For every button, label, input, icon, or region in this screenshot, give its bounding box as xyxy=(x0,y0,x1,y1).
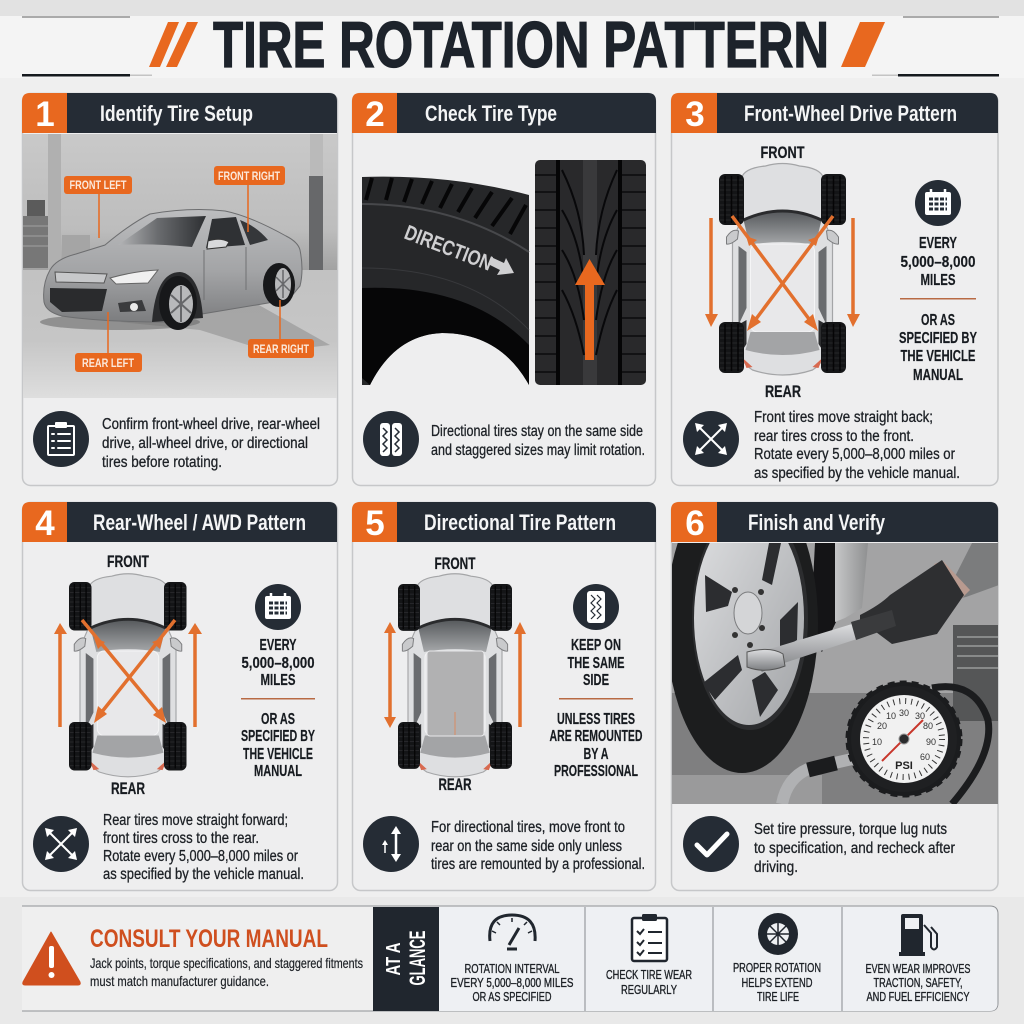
panel 4 description: as specified by the vehicle manual. xyxy=(103,866,304,883)
sleeve and glove holding wrench xyxy=(747,543,999,672)
interval text: MANUAL xyxy=(254,763,302,780)
tire sidewall with direction marking xyxy=(362,177,529,385)
glance cell 3: extend tire life: PROPER ROTATION xyxy=(733,961,821,975)
panel 1 description: drive, all-wheel drive, or directional xyxy=(102,435,308,452)
label: front left: FRONT LEFT xyxy=(70,178,127,192)
diagram: RWD/AWD rotation car top view xyxy=(54,574,202,777)
panel 5 header xyxy=(352,502,656,543)
panel 5 description: tires are remounted by a professional. xyxy=(431,856,645,873)
panel 4 header: 4 xyxy=(35,504,55,543)
panel 1 description: tires before rotating. xyxy=(102,454,222,471)
label: rear left: REAR LEFT xyxy=(82,356,135,370)
label: rear left xyxy=(75,353,142,372)
panel 2 header xyxy=(352,93,656,134)
same-side text: PROFESSIONAL xyxy=(554,763,638,780)
panel 4 description: Rear tires move straight forward; xyxy=(103,812,288,829)
icon: tire tread xyxy=(573,584,619,630)
sedan body xyxy=(44,210,302,322)
panel 5: directional tire pattern xyxy=(352,502,656,890)
panel 6 description xyxy=(754,821,955,876)
icon: vertical double arrow xyxy=(363,816,419,872)
glance cell 2: check tire wear xyxy=(585,907,713,1011)
interval text: EVERY xyxy=(260,637,297,654)
panel 5 header: Directional Tire Pattern xyxy=(424,510,616,535)
interval text: THE VEHICLE xyxy=(900,348,976,365)
glance cell 1: rotation interval: OR AS SPECIFIED xyxy=(472,990,552,1004)
panel 6: finish and verify xyxy=(666,473,999,890)
pressure gauge: 10 xyxy=(886,711,896,721)
panel 1 header: Identify Tire Setup xyxy=(100,101,253,126)
glance cell 3: extend tire life xyxy=(713,907,842,1011)
icon: tire xyxy=(758,913,798,955)
glance cell 2: check tire wear: REGULARLY xyxy=(621,983,677,997)
panel 2 header: Check Tire Type xyxy=(425,101,557,126)
tire tread with orange arrow xyxy=(535,160,646,385)
icon: checklist clipboard xyxy=(632,914,667,961)
panel 3 description: Rotate every 5,000–8,000 miles or xyxy=(754,446,955,463)
panel 2: check tire type xyxy=(352,93,656,486)
pressure gauge xyxy=(847,682,961,796)
interval text: 5,000–8,000 xyxy=(900,254,976,271)
panel 5 description xyxy=(431,819,645,873)
panel 5 header: 5 xyxy=(365,504,385,543)
wheel xyxy=(672,543,818,773)
same-side text: UNLESS TIRES xyxy=(557,711,635,728)
panel 1 description: Confirm front-wheel drive, rear-wheel xyxy=(102,416,320,433)
label: front: FRONT xyxy=(434,554,476,573)
icon: crossing arrows xyxy=(683,411,739,467)
glance cell 2: check tire wear: CHECK TIRE WEAR xyxy=(606,968,692,982)
panel 2 description: and staggered sizes may limit rotation. xyxy=(431,442,645,459)
glance cell 1: rotation interval: ROTATION INTERVAL xyxy=(464,962,560,976)
label: front right xyxy=(214,166,285,185)
panel 4 description: front tires cross to the rear. xyxy=(103,830,259,847)
warning text: CONSULT YOUR MANUAL xyxy=(90,925,328,953)
panel 2 description: Directional tires stay on the same side xyxy=(431,423,643,440)
icon: gauge xyxy=(490,915,535,949)
glance cell 4: even wear: EVEN WEAR IMPROVES xyxy=(866,962,970,976)
diagram: directional rotation car top view xyxy=(384,574,526,777)
glance cell 3: extend tire life: TIRE LIFE xyxy=(757,990,799,1004)
title xyxy=(22,8,999,81)
panel 2 description xyxy=(431,423,645,459)
icon: calendar xyxy=(255,584,301,630)
panel 3: front-wheel drive pattern xyxy=(671,93,998,486)
label: rear right xyxy=(248,339,314,358)
interval text: SPECIFIED BY xyxy=(899,330,977,347)
label: front: FRONT xyxy=(760,143,805,162)
warning triangle xyxy=(23,932,80,985)
panel 6 header xyxy=(671,502,998,543)
panel 3 description: as specified by the vehicle manual. xyxy=(754,465,960,482)
panel 3 header: 3 xyxy=(685,95,705,134)
at a glance sidebar: AT A xyxy=(383,942,405,976)
panel 4 description xyxy=(103,812,304,883)
icon: tire tread xyxy=(363,411,419,467)
label: rear: REAR xyxy=(765,382,801,401)
icon: fuel pump xyxy=(899,914,937,956)
panel 1 description xyxy=(102,416,320,471)
panel 1 header: 1 xyxy=(35,95,55,134)
title right slash xyxy=(841,22,885,67)
glance cell 4: even wear xyxy=(842,907,998,1011)
same-side text: ARE REMOUNTED xyxy=(550,728,642,745)
interval text: SPECIFIED BY xyxy=(241,728,315,745)
photo: torque wrench on lug nuts and pressure gauge xyxy=(672,543,998,804)
icon: clipboard xyxy=(33,411,89,467)
warning text xyxy=(90,925,363,989)
interval text: MANUAL xyxy=(913,367,963,384)
label: rear right: REAR RIGHT xyxy=(253,342,309,356)
tire position labels xyxy=(64,166,314,372)
label: rear: REAR xyxy=(438,775,472,794)
warning text: must match manufacturer guidance. xyxy=(90,973,269,989)
panel 2 header: 2 xyxy=(365,95,385,134)
panel 6 header: Finish and Verify xyxy=(748,510,886,535)
panel 4 header: Rear-Wheel / AWD Pattern xyxy=(93,510,306,535)
label: rear: REAR xyxy=(111,779,145,798)
interval text xyxy=(899,235,977,384)
same-side text: THE SAME xyxy=(568,655,625,672)
footer: consult your manual and at a glance xyxy=(22,906,998,1011)
panel 3 description: rear tires cross to the front. xyxy=(754,428,914,445)
glance cell 1: rotation interval: EVERY 5,000–8,000 MILES xyxy=(450,976,574,990)
glance cell 1: rotation interval xyxy=(439,907,585,1011)
panel 6 description: to specification, and recheck after xyxy=(754,840,955,857)
panel 3 header: Front-Wheel Drive Pattern xyxy=(744,101,957,126)
glance cell 4: even wear: AND FUEL EFFICIENCY xyxy=(866,990,970,1004)
pressure gauge: 30 xyxy=(915,711,925,721)
label: front left xyxy=(64,176,132,194)
hoses xyxy=(782,759,852,804)
icon: crossing arrows xyxy=(33,816,89,872)
pressure gauge: PSI xyxy=(895,760,913,772)
panel 3 description: Front tires move straight back; xyxy=(754,409,933,426)
car fender xyxy=(810,543,868,652)
panel 5 description: For directional tires, move front to xyxy=(431,819,625,836)
pressure gauge: 20 xyxy=(877,721,887,731)
panel 6 header: 6 xyxy=(685,504,705,543)
pressure gauge: 60 xyxy=(920,752,930,762)
at a glance sidebar: GLANCE xyxy=(405,930,430,986)
panel 1 header xyxy=(22,93,337,134)
icon: calendar xyxy=(915,180,961,226)
pressure gauge: 10 xyxy=(872,737,882,747)
photo: sedan in workshop with tire position labels xyxy=(23,134,337,398)
panel 4: rear-wheel / AWD pattern xyxy=(22,502,338,890)
pressure gauge: 80 xyxy=(923,721,933,731)
tire sidewall with direction marking: DIRECTION xyxy=(401,221,495,276)
panel 3 description xyxy=(754,409,960,482)
pressure gauge: 30 xyxy=(899,708,909,718)
interval text xyxy=(241,637,315,780)
panel 6 description: Set tire pressure, torque lug nuts xyxy=(754,821,947,838)
same-side text: SIDE xyxy=(583,672,609,689)
panel 6 description: driving. xyxy=(754,859,798,876)
glance cell 4: even wear: TRACTION, SAFETY, xyxy=(874,976,962,990)
glance cell 3: extend tire life: HELPS EXTEND xyxy=(742,976,812,990)
interval text: EVERY xyxy=(919,235,957,252)
panel 5 description: rear on the same side only unless xyxy=(431,838,622,855)
title text: TIRE ROTATION PATTERN xyxy=(213,8,829,81)
diagram: FWD rotation car top view xyxy=(705,164,860,375)
interval text: THE VEHICLE xyxy=(243,746,313,763)
at a glance sidebar xyxy=(373,907,439,1011)
interval text: MILES xyxy=(920,272,956,289)
interval text: OR AS xyxy=(921,312,955,329)
same-side text: KEEP ON xyxy=(571,637,621,654)
tool cabinet xyxy=(953,625,999,721)
interval text: OR AS xyxy=(261,711,295,728)
panel 1: identify tire setup xyxy=(22,93,338,486)
icon: check mark xyxy=(683,816,739,872)
same-side text xyxy=(550,637,642,780)
interval text: MILES xyxy=(260,672,296,689)
panel 3 header xyxy=(671,93,998,134)
label: front: FRONT xyxy=(107,552,149,571)
label: front right: FRONT RIGHT xyxy=(218,169,280,183)
same-side text: BY A xyxy=(584,746,609,763)
panel 4 header xyxy=(22,502,337,543)
title left slashes xyxy=(149,22,198,67)
warning text: Jack points, torque specifications, and staggered fitments xyxy=(90,955,363,971)
panel 4 description: Rotate every 5,000–8,000 miles or xyxy=(103,848,298,865)
interval text: 5,000–8,000 xyxy=(242,655,315,672)
pressure gauge: 90 xyxy=(926,737,936,747)
